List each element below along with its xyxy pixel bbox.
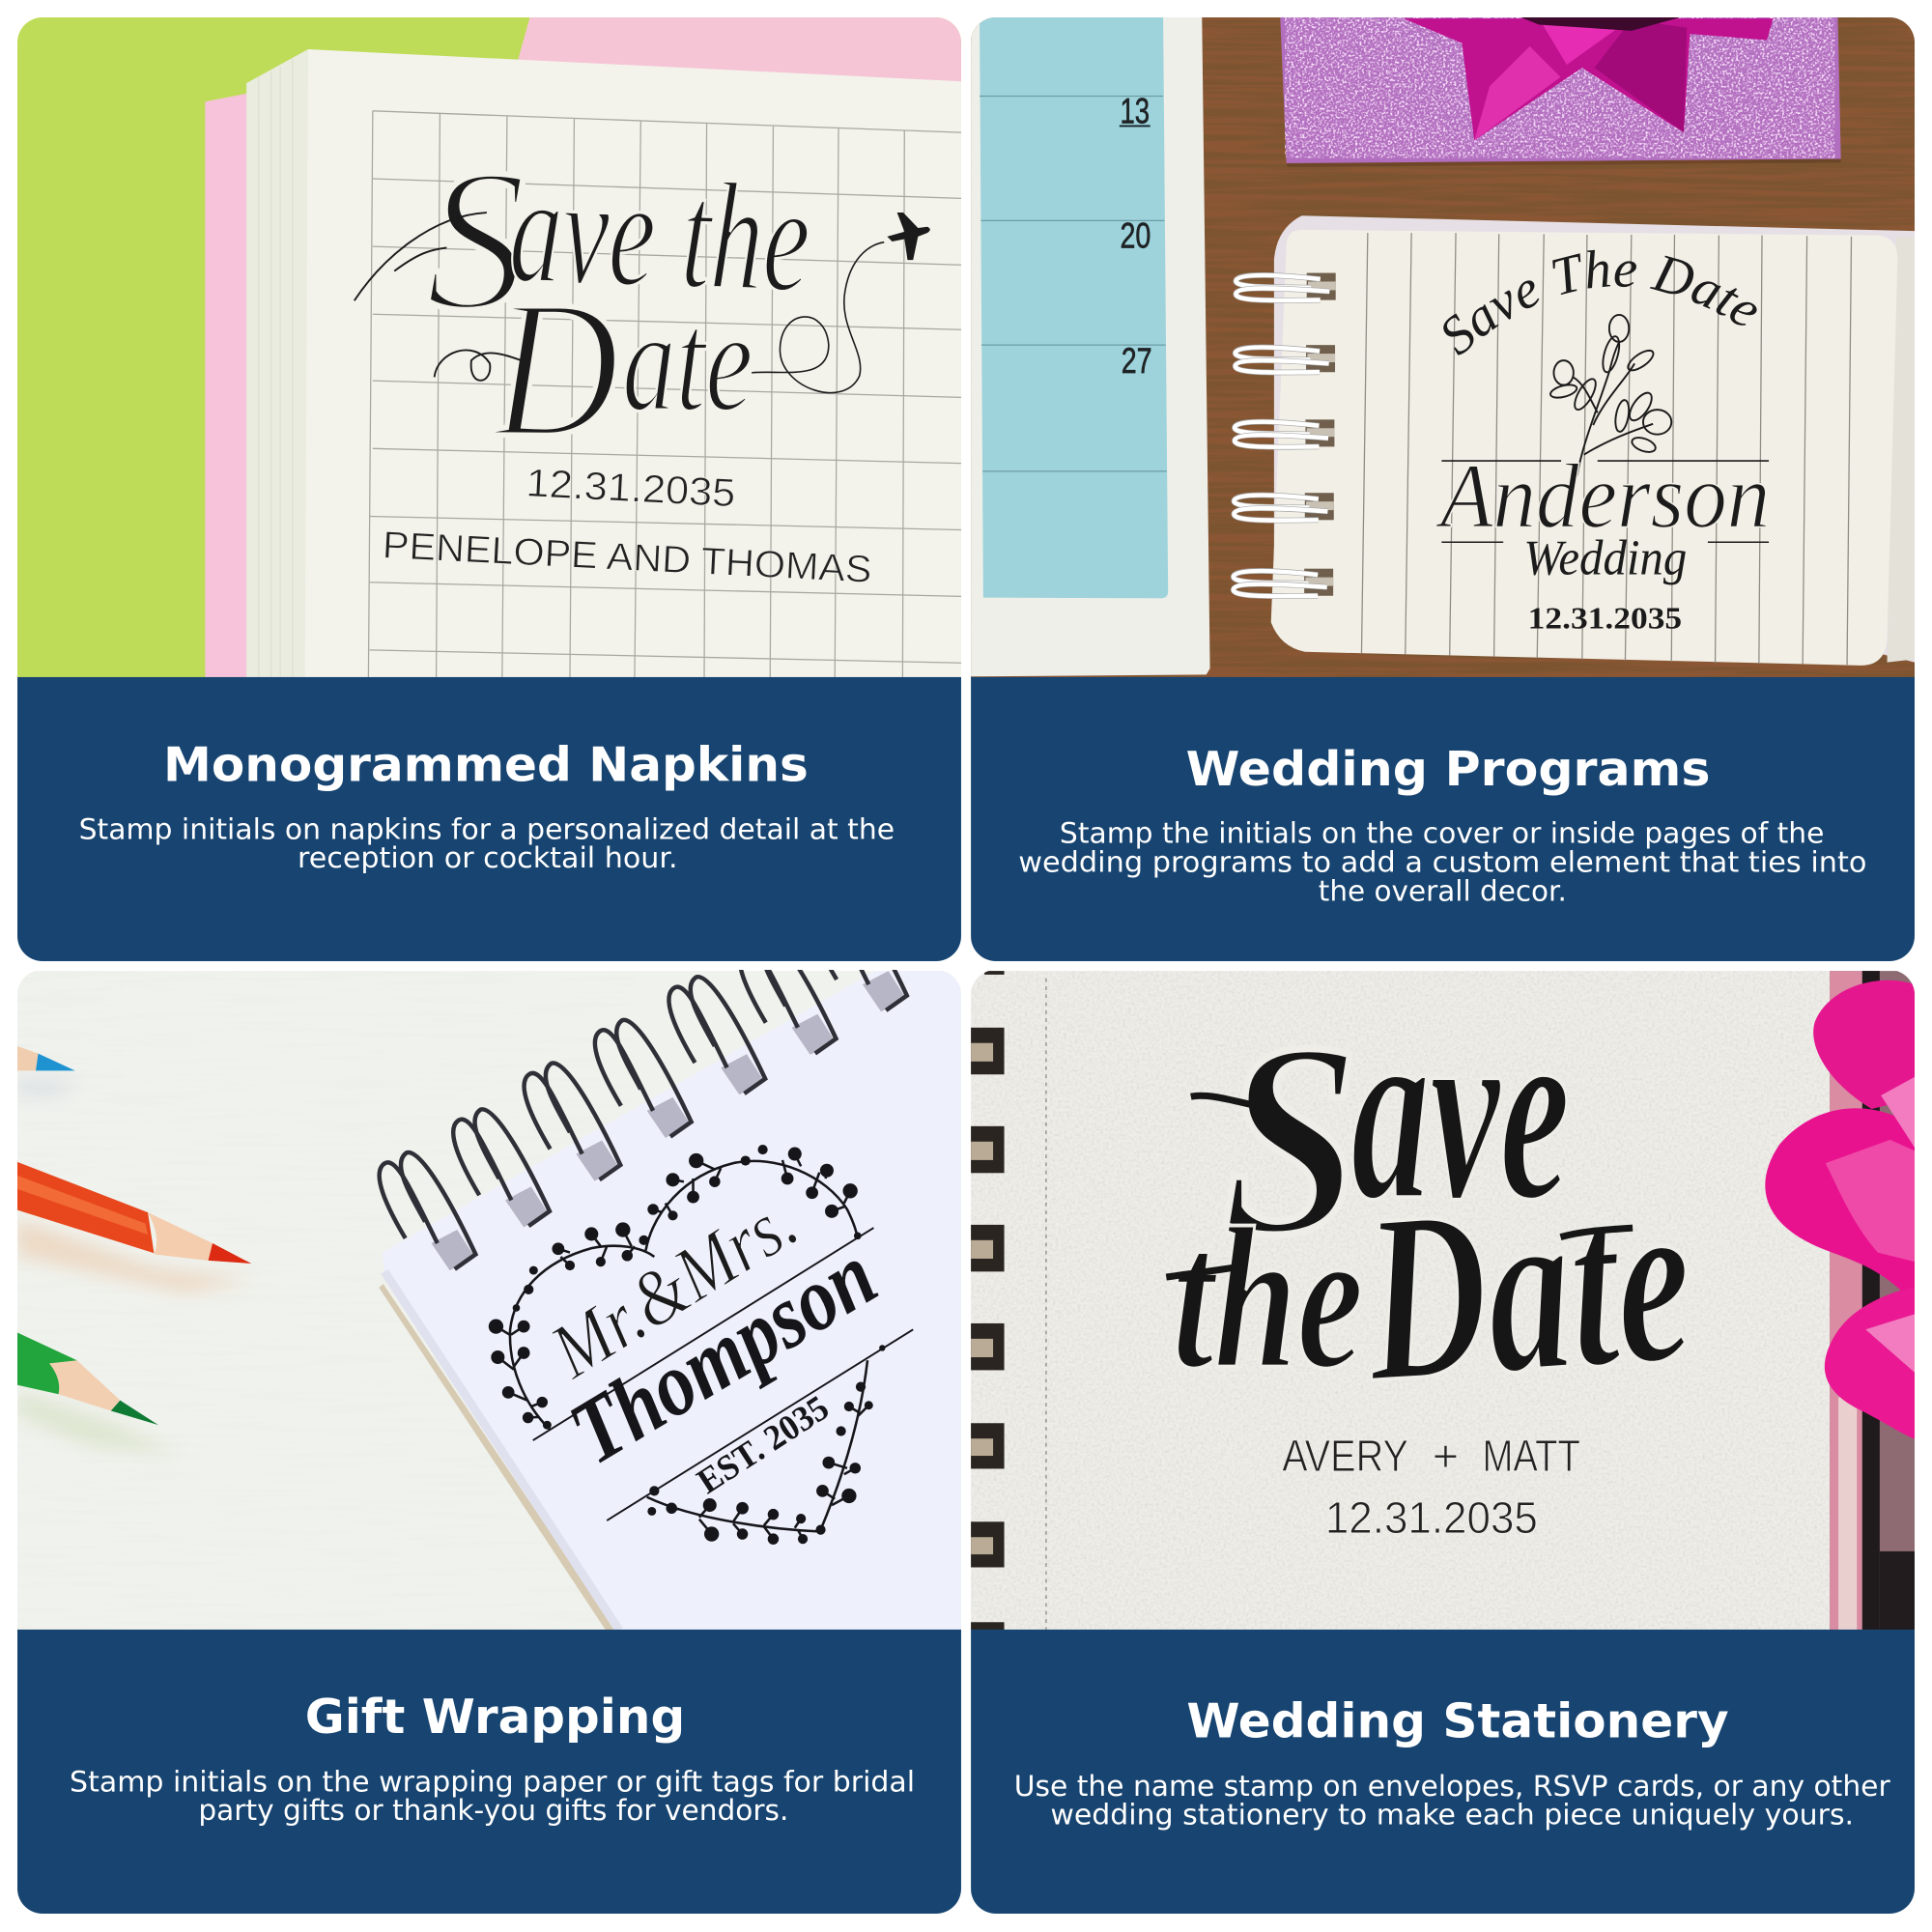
caption panel — [971, 1630, 1915, 1919]
stamp: save the date script: ave the — [507, 144, 813, 325]
photo: save the date notebook on green and pink — [17, 17, 961, 678]
stamp: save the date script: S — [425, 127, 526, 353]
stamp: save the date script: ate — [622, 281, 753, 441]
stamp: wedding: Wedding — [1523, 529, 1687, 585]
binding holes — [971, 971, 1005, 1631]
panel: monogrammed napkins — [17, 17, 961, 962]
photo: wood desk with calendar, gift and notebook — [971, 17, 1915, 678]
caption panel — [17, 677, 961, 962]
spiral rings — [1234, 273, 1336, 596]
description — [1014, 1770, 1891, 1831]
flower petals — [1765, 980, 1915, 1439]
stamp: thompson: Thompson — [554, 1225, 893, 1484]
notebook grid — [368, 111, 961, 678]
panel: wedding stationery — [971, 966, 1915, 1919]
stamp: brush flourishes — [1166, 1095, 1633, 1277]
heading: Wedding Programs — [1186, 741, 1710, 797]
stamp: names — [1282, 1431, 1580, 1481]
spiral coils — [380, 894, 907, 1270]
pencil: green — [17, 1332, 158, 1425]
calendar — [971, 17, 1210, 676]
stamp: save brush lettering — [1222, 966, 1570, 1293]
stamp: rules — [1441, 461, 1769, 542]
description — [70, 1766, 915, 1827]
stamp: rules — [533, 1228, 913, 1520]
calendar: 27 — [1122, 341, 1152, 381]
description: Use the name stamp on envelopes, RSVP cards, or any other — [1014, 1770, 1891, 1803]
description: Stamp the initials on the cover or inside pages of the — [1060, 817, 1824, 850]
notebook page — [379, 894, 961, 1631]
stamp: date: 12.31.2035 — [1325, 1492, 1538, 1543]
description — [79, 813, 895, 874]
stamp: names: PENELOPE AND THOMAS — [382, 524, 873, 591]
description: wedding programs to add a custom element that ties into — [1018, 845, 1866, 878]
stamp: the date brush lettering: the — [1173, 1185, 1363, 1411]
stamp: save the date arc: Save The Date — [1443, 249, 1757, 355]
stamp: save brush lettering: ave — [1351, 966, 1570, 1253]
stamp: heart wreath — [489, 1145, 886, 1545]
pencil shadows — [17, 1074, 252, 1453]
gift box — [1280, 17, 1841, 167]
photo: textured notebook with pink flowers — [971, 966, 1915, 1631]
stamp: date: 12.31.2035 — [526, 460, 736, 515]
heading: Gift Wrapping — [305, 1689, 685, 1745]
description — [1020, 821, 1865, 901]
book edge — [1830, 971, 1915, 1631]
stamp: save the date script — [354, 171, 808, 439]
icon: airplane — [887, 213, 930, 260]
gift bow — [1404, 17, 1774, 140]
plane trail — [752, 242, 884, 393]
stamp: save brush lettering: S — [1222, 986, 1360, 1293]
calendar: 13 — [1120, 92, 1150, 131]
description: party gifts or thank-you gifts for vendors. — [198, 1794, 788, 1827]
caption panel — [17, 1630, 961, 1919]
stamp: mr and mrs: Mr.&Mrs. — [535, 1177, 812, 1395]
stamp: floral sprig — [1549, 315, 1671, 475]
panel: wedding programs — [971, 17, 1915, 961]
description: the overall decor. — [1319, 874, 1567, 907]
heading: Monogrammed Napkins — [163, 737, 809, 793]
pencil: red — [17, 1162, 251, 1264]
description: Stamp initials on the wrapping paper or gift tags for bridal — [70, 1766, 915, 1799]
description: wedding stationery to make each piece uniquely yours. — [1050, 1798, 1854, 1831]
pencil: blue — [17, 1046, 75, 1070]
photo: white table with pencils and notebook — [17, 894, 961, 1631]
description: reception or cocktail hour. — [298, 841, 678, 874]
stamp: save the date script: D — [491, 260, 619, 478]
stamp: the date brush lettering: Date — [1356, 1144, 1699, 1433]
stamp: established: EST. 2035 — [691, 1388, 836, 1502]
stamp: names: AVERY — [1282, 1431, 1408, 1481]
stamp: names: MATT — [1482, 1431, 1580, 1481]
stamp: names: + — [1433, 1431, 1459, 1481]
notebook — [1234, 215, 1915, 666]
heading: Wedding Stationery — [1186, 1693, 1729, 1749]
stamp: date: 12.31.2035 — [1528, 602, 1682, 636]
panel: gift wrapping — [17, 894, 961, 1919]
description: Stamp initials on napkins for a personalized detail at the — [79, 813, 895, 846]
caption panel — [971, 677, 1915, 962]
stamp: the date brush lettering — [1173, 1144, 1699, 1433]
calendar: 20 — [1120, 215, 1151, 255]
stamp: anderson: Anderson — [1435, 444, 1770, 547]
